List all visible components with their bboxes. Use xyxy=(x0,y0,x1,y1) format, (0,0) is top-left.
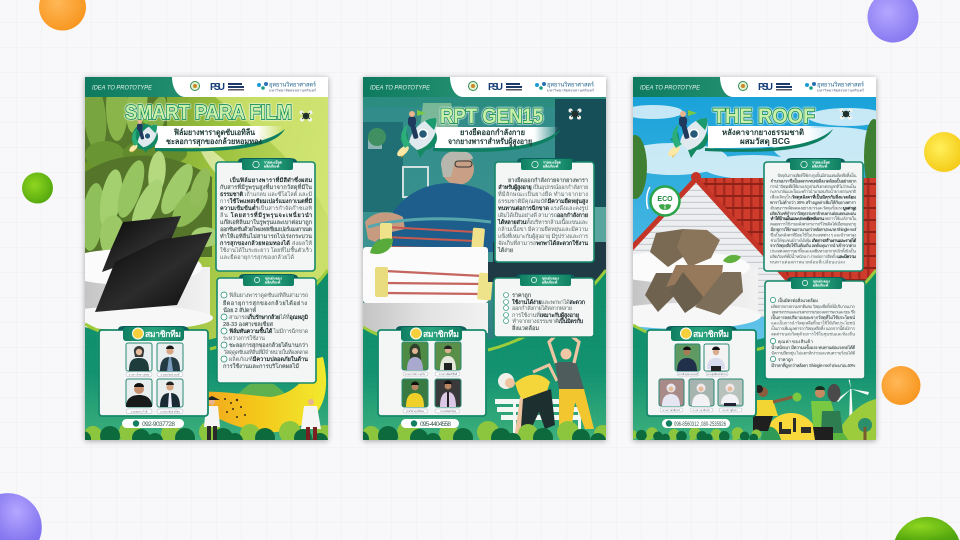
photos xyxy=(126,343,183,407)
body text: ต้นทุนการผลิตลดลงอย่างมากและวัสดุแข็งแรง มูลค่าสูง xyxy=(770,203,856,211)
body text: กับสารที่มีรูพรุนสูงที่มาจากวัสดุที่มีใน xyxy=(220,183,312,192)
green hills xyxy=(833,399,876,440)
body text: ทำให้บ้านเย็นและประหยัดพลังงาน ลดการใช้แอร์ภายใน xyxy=(770,214,857,221)
numbered list: สิ่งแวดล้อม xyxy=(511,324,539,332)
subtitle ribbon: ฟิล์มยางพาราดูดซับเอทิลีน xyxy=(174,127,256,138)
name labels: นายอนันต์ มีสุข xyxy=(440,409,456,414)
body text: กะลาปาล์มและใยมะพร้าวนำมาผสมกับน้ำยางธรรมชาติ xyxy=(770,188,856,194)
body text xyxy=(770,171,857,264)
title: THE ROOF xyxy=(713,105,815,128)
body text: ทำให้เอทิลีนไม่สามารถไปเร่งกระบวน xyxy=(220,232,312,240)
rubber band product xyxy=(375,267,493,301)
subtitle ribbon: ผสมวัสดุ BCG xyxy=(740,137,790,147)
panel: product highlights: จุดเด่นของ xyxy=(542,276,559,282)
numbered list: ราคาถูก xyxy=(512,292,532,300)
body text: การใช้โพแทสเซียมเปอร์แมงกาเนตที่มี xyxy=(220,197,312,205)
bushes xyxy=(85,421,328,440)
header bar: มหาวิทยาลัยสงขลานครินทร์ xyxy=(269,88,316,92)
body text xyxy=(497,177,588,254)
body text: เพื่อผลิตเป็นวัสดุหลังคาที่เป็นมิตรกับสิ่งแวดล้อม xyxy=(770,193,856,201)
body text: ปัจจุบันการผลิตที่ใช้ยางรูปปั้นมีส่วนผสมที่เหลือทิ้งเป็น xyxy=(778,171,857,179)
person with plant xyxy=(751,385,802,431)
numbered list xyxy=(221,291,309,370)
red tile roof xyxy=(699,178,876,283)
body text: ได้หลายส่วนทั้งบริหารกล้ามเนื้อแขนและ xyxy=(497,218,588,226)
body text: การนำวัสดุเหลือใช้มาแปรรูปร่วมกับยางธรรมชาติ ไม่ว่าจะเป็น xyxy=(770,182,856,190)
body text: ธรรมชาติ เถ้าแกลบ และซีโอไลต์ และมี xyxy=(220,190,312,198)
numbered list: และเป็นการนำวัสดุเหลือทิ้งมาใช้ให้เกิดประโยชน์ xyxy=(771,318,855,326)
name labels: นายวิชาญ ศรีทอง xyxy=(406,409,424,413)
natural rubber roof shingles xyxy=(645,229,743,315)
name labels: นางสาววิทยา สุขสม xyxy=(129,372,150,377)
numbered list: ทำจากยางธรรมชาติเป็นมิตรกับ xyxy=(512,317,584,325)
header bar: อุทยานวิทยาศาสตร์ xyxy=(547,80,595,88)
numbered list xyxy=(770,296,856,369)
numbered list: ใช้งานได้ง่ายและพกพาได้สะดวก xyxy=(512,298,586,306)
body text: สำหรับผู้สูงอายุ เป็นอุปกรณ์ออกกำลังกาย xyxy=(498,183,588,192)
product podium xyxy=(633,252,761,329)
room background xyxy=(363,97,606,242)
lower banana bunch xyxy=(79,150,219,259)
trees xyxy=(633,119,876,199)
header bar: PSU xyxy=(210,82,225,93)
panel: product details: รายละเอียด xyxy=(812,160,831,164)
title: RPT GEN15 xyxy=(440,105,543,128)
panel: team members: สมาชิกทีม xyxy=(145,329,181,339)
green base xyxy=(633,270,876,440)
numbered list: มีความยืดหยุ่น ไม่แตกหักง่ายและทนความร้อนได้ดี xyxy=(771,350,855,356)
header bar: มหาวิทยาลัยสงขลานครินทร์ xyxy=(547,88,594,92)
body text: ธรรมชาติมีคุณสมบัติมีความยืดหยุ่นสูง xyxy=(498,198,588,206)
header bar: มหาวิทยาลัยสงขลานครินทร์ xyxy=(817,88,864,92)
panel: product highlights: ผลิตภัณฑ์ xyxy=(265,280,280,284)
numbered list: สามารถเก็บรักษากล้วยได้ที่อุณหภูมิ xyxy=(229,313,308,322)
icon: drone xyxy=(568,108,582,120)
panel: product highlights: ผลิตภัณฑ์ xyxy=(542,280,557,284)
sustainability scene xyxy=(761,413,815,440)
numbered list: มีราคาที่ถูกกว่าหลังคา Shingle roof ประมาณ 40% xyxy=(771,362,855,369)
wind turbine xyxy=(837,380,869,416)
subtitle ribbon xyxy=(433,127,561,152)
body text: ตลอดการใช้งานหลังคาสามารถรีไซเคิลได้เมื่อหมดอายุ xyxy=(770,221,856,228)
body text: ออกซิเดชันด้วยโพแทสเซียมเปอร์แมงกาเนต xyxy=(220,225,312,233)
resistance band photo xyxy=(380,223,485,247)
rocket emblem xyxy=(395,110,437,158)
black film sheets xyxy=(95,216,212,312)
green base xyxy=(85,270,328,440)
numbered list: ฟิล์มทันความชื้นได้ ไม่มีการฉีกขาด xyxy=(229,326,309,335)
panel: product details xyxy=(764,158,863,271)
scientists xyxy=(204,396,321,440)
panel: product details: ผลิตภัณฑ์ xyxy=(543,164,558,168)
body text: แข็งที่เหมาะกับผู้สูงอายุ มีรูปร่างและการ xyxy=(498,232,588,240)
numbered list: ยืดอายุการสุกของกล้วยได้อย่าง xyxy=(222,299,307,307)
panel: team members xyxy=(647,326,756,416)
subtitle ribbon: ชะลอการสุกของกล้วยหอมทอง xyxy=(166,136,262,147)
phone pill: 092-9037728 xyxy=(142,421,175,428)
body text: แก๊สเอทิลีนมาในรูพรุนและเบาต่อมาถูก xyxy=(220,218,313,227)
photos xyxy=(402,342,461,407)
numbered list: วัสดุดูดซับเอทิลีนที่มีจำหน่ายในท้องตลาด xyxy=(224,348,309,356)
subtitle ribbon: หลังคาจากยางธรรมชาติ xyxy=(722,128,804,137)
product podium xyxy=(85,250,213,330)
body text: จำนวนมาก ซึ่งเป็นผลกระทบต่อสิ่งแวดล้อมเป็นอย่างมาก xyxy=(770,176,857,183)
poster 2: RPT Gen15 xyxy=(353,77,612,449)
clouds xyxy=(633,105,876,178)
phone pill: 095-4404558 xyxy=(420,421,451,428)
numbered list: ราคาถูก xyxy=(778,357,793,363)
header bar: IDEA TO PROTOTYPE xyxy=(92,84,153,92)
numbered list: ออกกำลังกายได้หลากหลาย xyxy=(512,305,572,312)
numbered list: การใช้งานและการบริโภคผลไม้ xyxy=(223,362,299,370)
older man stretching xyxy=(549,330,594,432)
name labels: นายธนวัฒน์ ทองดี xyxy=(160,372,180,376)
product podium xyxy=(363,247,488,333)
body text: มีอายุการใช้งานยาวนานกว่าหลังคาประเภท Shingle roof xyxy=(770,226,857,233)
numbered list: ฟิล์มยางพาราดูดซับเอทิลีนสามารถ xyxy=(229,291,308,299)
panel: product highlights xyxy=(494,274,594,337)
panel: product details: ผลิตภัณฑ์ xyxy=(264,164,279,168)
body text: จัดเก็บที่สามารถพกพาได้สะดวกใช้งาน xyxy=(498,239,588,247)
name labels: นางสาวซูไฮลา xyxy=(722,408,738,412)
rocket emblem xyxy=(666,110,708,158)
panel: product details: ผลิตภัณฑ์ xyxy=(812,164,827,168)
panel: product highlights xyxy=(765,277,865,379)
phone pill xyxy=(662,419,730,428)
body text: เป็นฟิล์มยางพาราที่มีสีดำซึ่งผสม xyxy=(230,176,312,184)
header bar xyxy=(363,77,606,97)
body text: การสุกของกล้วยหอมทองได้ ส่งผลให้ xyxy=(220,239,312,247)
numbered list: เป็นการลดปริมาณขยะจากวัสดุที่ไม่ใช้ประโยชน์ xyxy=(771,313,855,321)
body text: ประเทศ ลดการเผาทิ้งและมลพิษทางอากาศ อีกทั้งยังเป็น xyxy=(770,247,856,254)
panel: team members: สมาชิกทีม xyxy=(693,329,729,339)
poster 3: The Roof xyxy=(630,74,880,444)
panel: product highlights: จุดเด่นของ xyxy=(813,278,830,284)
numbered list: ระหว่างการใช้งาน xyxy=(223,335,265,342)
upper banana bunch xyxy=(85,97,187,166)
numbered list: เป็นการเพิ่มมูลค่าจากวัสดุเหลือทิ้ง นอกจากนี้ยังมีการ xyxy=(771,324,856,332)
header bar: อุทยานวิทยาศาสตร์ xyxy=(269,80,317,88)
body text: กล้ามเนื้อขา มีความยืดหยุ่นและมีความ xyxy=(498,225,588,233)
person with recycling bag xyxy=(811,384,843,440)
name labels xyxy=(403,372,460,414)
body text: ทนทานต่อสภาพแวดล้อมที่เปลี่ยนแปลง xyxy=(770,258,845,264)
numbered list: ลดค่าขนส่งวัสดุด้วยการใช้ในชุมชนและท้องถิ่น xyxy=(771,330,855,338)
icon: drone xyxy=(840,108,852,120)
panel: team members xyxy=(378,326,486,416)
subtitle ribbon xyxy=(705,126,833,152)
header bar: อุทยานวิทยาศาสตร์ xyxy=(817,80,865,88)
panel: product highlights xyxy=(217,274,316,383)
body text: ใช้งานได้ในระยะยาว โดยที่ไม่ชื้นตัวเร็ว xyxy=(220,246,312,254)
numbered list: น้ำหนักเบา มีความแข็งแรง ทนทานต่อแรงกดได้ดี xyxy=(771,343,855,350)
body text xyxy=(219,176,313,261)
name labels: นางสาวพิมพ์ ชื่นดี xyxy=(439,372,458,376)
icon: leaf xyxy=(723,255,741,263)
panel: product details: รายละเอียด xyxy=(264,160,283,164)
header bar: IDEA TO PROTOTYPE xyxy=(640,84,701,92)
icon: drone xyxy=(300,110,312,122)
numbered list: อุตสาหกรรมและเกษตรกรรมของ ลดการเผาและขยะ ซึ่ง xyxy=(771,308,855,316)
header bar: PSU xyxy=(488,82,503,93)
subtitle ribbon: ยางยืดออกกำลังกาย xyxy=(460,128,525,137)
numbered list: การใช้งานที่เหมาะกับผู้สูงอายุ xyxy=(512,311,579,320)
numbered list xyxy=(504,292,586,332)
bushes xyxy=(633,427,762,440)
numbered list: น้อย 2 สัปดาห์ xyxy=(223,306,256,314)
body text: ยางยืดออกกำลังกายจากยางพารา xyxy=(508,177,588,184)
body text: และยืดอายุการสุกของกล้วยได้ xyxy=(220,254,294,261)
phone pill: 096-8560312 ,080-2535926 xyxy=(674,421,726,428)
header bar: PSU xyxy=(758,82,773,93)
header bar xyxy=(633,77,876,97)
header bar: IDEA TO PROTOTYPE xyxy=(370,84,431,92)
body text: พาราไม่ต่ำกว่า 30% สร้างมูลค่าเพิ่มให้กับยางพารา xyxy=(770,199,857,206)
panel: product details xyxy=(216,158,315,271)
green base xyxy=(363,270,606,440)
numbered list: 28-33 องศาเซลเซียส xyxy=(223,321,274,328)
body text: ได้ง่าย xyxy=(497,246,513,254)
header bar xyxy=(85,77,328,97)
body text: ที่มีลักษณะเป็นยางยืด ทำมาจากยาง xyxy=(498,190,588,198)
older woman stretching xyxy=(498,365,557,435)
panel: product highlights: จุดเด่นของ xyxy=(265,276,282,282)
name labels xyxy=(126,372,183,414)
body text: ความเข้มข้นต่ำเป็นสารกำจัดก๊าซเอทิ xyxy=(220,204,312,212)
body text: ผลิตภัณฑ์ทำจากวัสดุธรรมชาติ ทนทานต่อแดดและฝน xyxy=(770,210,856,217)
eco badge: ECO xyxy=(657,196,673,203)
name labels: นางสาวฟาตีมะห์ xyxy=(662,408,680,412)
eco badge xyxy=(647,186,680,216)
name labels xyxy=(660,372,742,412)
man exercising xyxy=(365,152,606,262)
panel: team members xyxy=(99,326,208,416)
phone pill xyxy=(122,419,184,428)
name labels: นายธีรยุทธ ทองแท้ xyxy=(678,372,698,377)
icon: leaf xyxy=(370,238,393,254)
name labels: นายสุทธิพงษ์ ดีงาม xyxy=(707,372,727,377)
bushes xyxy=(363,421,606,440)
title: SMART PARA FILM xyxy=(125,102,292,124)
body text: ทนทานต่อการฉีกขาด แรงดึงและคงรูป xyxy=(498,205,588,212)
photos xyxy=(659,344,743,406)
name labels: นางสาวอามีนะห์ xyxy=(692,408,710,412)
body text: ช่วยให้ชุมชนมีรายได้เพิ่ม เกิดการสร้างงานและรายได้ xyxy=(770,237,857,244)
numbered list: ผลิตภัณฑ์มีความปลอดภัยในด้าน xyxy=(229,355,308,363)
panel: product details: รายละเอียด xyxy=(543,160,562,164)
body text: จากวัสดุเหลือใช้ในท้องถิ่น ลดต้นทุนการนำเข้าจากต่าง xyxy=(770,242,856,249)
phone pill xyxy=(401,419,459,428)
house gable xyxy=(629,172,793,317)
panel: team members: สมาชิกทีม xyxy=(423,329,459,339)
body text: ซึ่งเป็นหลังคาที่นิยมใช้ในประเทศต่าง ๆ และมีราคาสูง xyxy=(770,230,856,238)
numbered list: เป็นมิตรต่อสิ่งแวดล้อม xyxy=(778,296,818,303)
name labels: นายประพันธ์ ศรีสุข xyxy=(160,409,180,414)
numbered list: ชะลอการสุกของกล้วยได้นานกว่า xyxy=(229,341,308,349)
body text: ลีน โดยสารที่มีรูพรุนจะเหนี่ยวนำ xyxy=(219,211,312,220)
name labels: นางสาวภัทรา สุขใจ xyxy=(405,372,426,377)
panel: product highlights: ผลิตภัณฑ์ xyxy=(813,282,828,288)
body text: ผลิตภัณฑ์ที่มีน้ำหนักเบา ง่ายต่อการติดตั้ง และมีความ xyxy=(770,253,856,259)
banana with test marks xyxy=(208,357,326,432)
numbered list: ผลิตจากยางธรรมชาติผสม วัสดุเหลือทิ้งที่มีปริมาณมาก xyxy=(771,303,855,310)
body text: เดิมได้เป็นอย่างดี สามารถออกกำลังกาย xyxy=(498,211,588,219)
name labels: นายสมชาย ใจดี xyxy=(131,409,148,413)
numbered list: คุณค่าของสินค้า xyxy=(778,338,814,345)
panel: product details xyxy=(495,158,594,262)
subtitle ribbon: จากยางพาราสำหรับผู้สูงอายุ xyxy=(448,136,532,147)
rocket emblem xyxy=(128,119,158,153)
subtitle ribbon xyxy=(155,126,285,151)
poster 1: Smart Para Film xyxy=(82,74,332,444)
white bench xyxy=(495,399,581,437)
